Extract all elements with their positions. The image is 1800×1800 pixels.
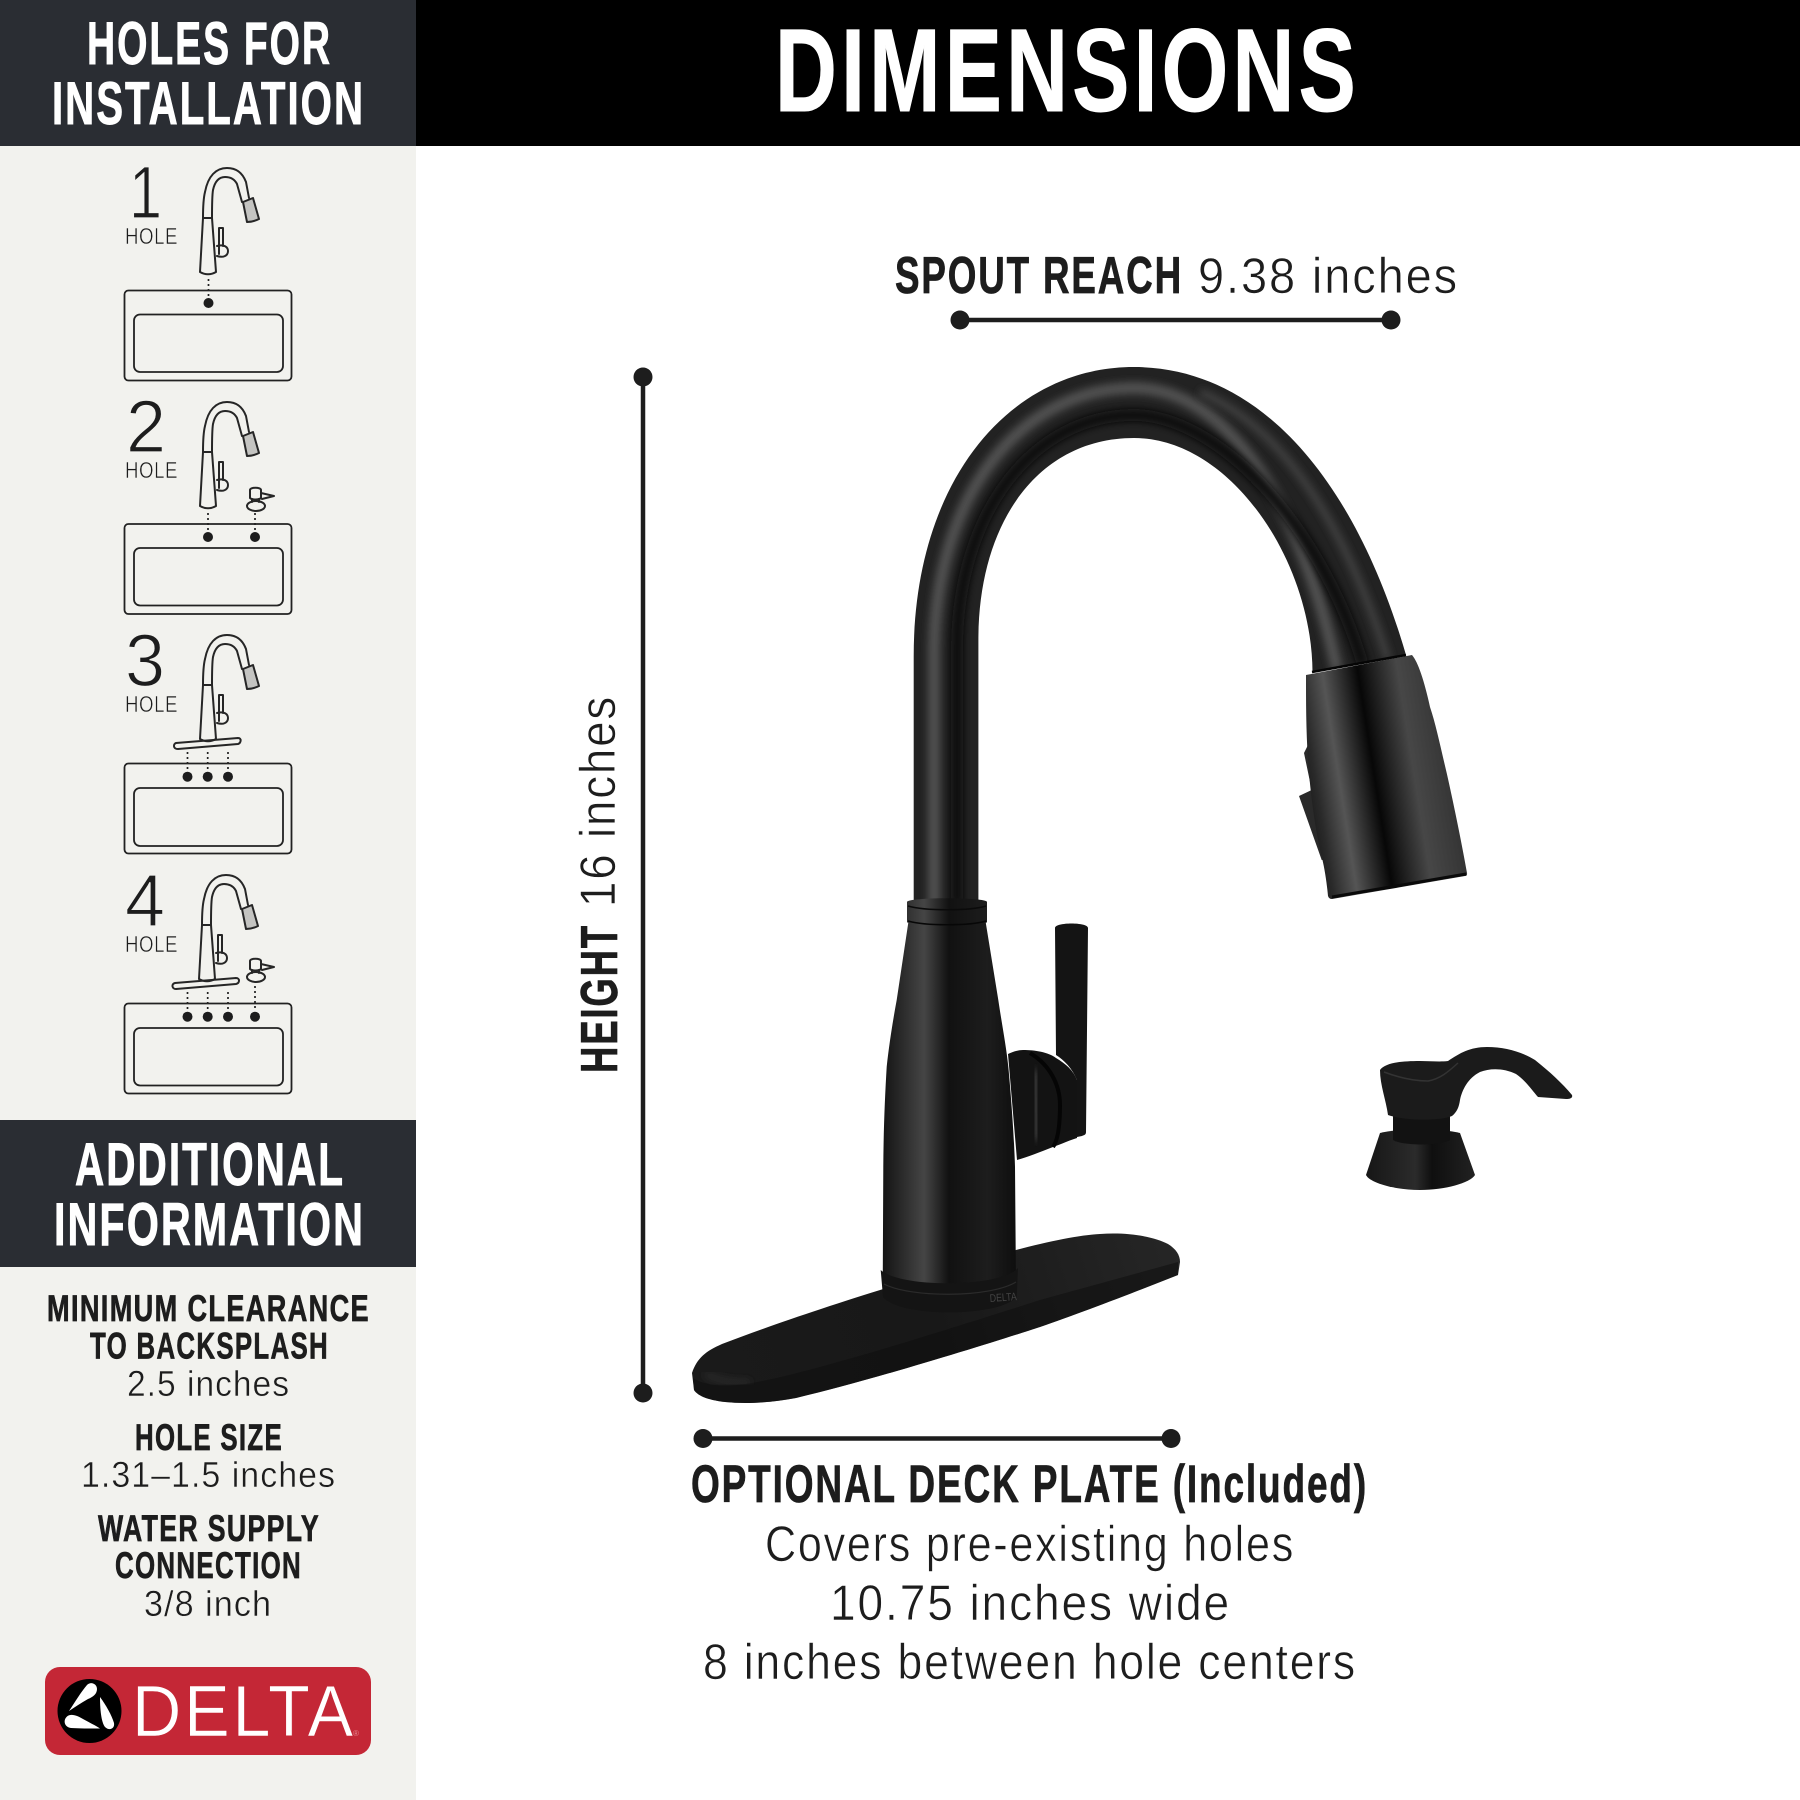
dimension: spout reach: 9.38 inches xyxy=(1198,248,1459,304)
option: 4 hole xyxy=(124,859,292,1094)
text block: minimum clearance xyxy=(47,1288,370,1404)
logo: delta xyxy=(45,1667,371,1755)
dimension: height: HEIGHT xyxy=(571,924,629,1073)
text block: hole size: HOLE SIZE xyxy=(135,1417,283,1458)
dimension: optional deck plate: Covers pre-existing holes xyxy=(765,1516,1295,1572)
faucet handle xyxy=(1008,924,1088,1160)
heading: holes for installation xyxy=(0,0,416,146)
option: 1 hole xyxy=(124,151,292,380)
heading: dimensions: DIMENSIONS xyxy=(775,5,1360,137)
dimension: height xyxy=(570,368,652,1402)
option: 4 hole: 4 xyxy=(125,859,165,942)
text block: hole size xyxy=(81,1417,336,1495)
heading: dimensions xyxy=(416,0,1800,146)
panel: sidebar xyxy=(0,0,416,1800)
illustration: soap dispenser xyxy=(1366,1047,1572,1190)
text block: minimum clearance: MINIMUM CLEARANCE xyxy=(47,1288,370,1329)
dimension: optional deck plate xyxy=(691,1429,1368,1690)
text block: water supply connection: 3/8 inch xyxy=(144,1583,272,1624)
option: 3 hole xyxy=(124,619,292,854)
logo: delta: ® xyxy=(353,1729,359,1738)
text block: water supply connection xyxy=(98,1508,320,1624)
dimension: spout reach xyxy=(895,247,1459,330)
spout tube xyxy=(900,360,1420,920)
text block: minimum clearance: 2.5 inches xyxy=(127,1363,290,1404)
text block: water supply connection: WATER SUPPLY xyxy=(98,1508,320,1549)
dimension: optional deck plate: OPTIONAL DECK PLATE (Included) xyxy=(691,1455,1368,1514)
faucet base ring: DELTA xyxy=(989,1291,1018,1305)
heading: additional information: INFORMATION xyxy=(54,1191,365,1258)
option: 3 hole: HOLE xyxy=(125,691,178,717)
heading: additional information xyxy=(0,1120,416,1267)
dimension: spout reach: SPOUT REACH xyxy=(895,247,1183,305)
spray head xyxy=(1299,655,1467,899)
text block: minimum clearance: TO BACKSPLASH xyxy=(90,1326,329,1366)
dimension: optional deck plate: 8 inches between hole centers xyxy=(703,1634,1357,1690)
heading: additional information: ADDITIONAL xyxy=(75,1131,345,1198)
deck plate xyxy=(692,1234,1180,1403)
option: 2 hole: 2 xyxy=(126,385,166,468)
option: 1 hole: HOLE xyxy=(125,223,178,249)
faucet body xyxy=(883,918,1016,1290)
faucet collar xyxy=(907,898,987,925)
option: 4 hole: HOLE xyxy=(125,931,178,957)
option: 2 hole xyxy=(124,385,292,614)
option: 3 hole: 3 xyxy=(125,619,165,702)
faucet base ring xyxy=(881,1268,1018,1312)
logo: delta: DELTA xyxy=(132,1672,356,1752)
option: 2 hole: HOLE xyxy=(125,457,178,483)
illustration: faucet xyxy=(692,360,1467,1403)
dimension: height: 16 inches xyxy=(570,695,626,907)
heading: holes for installation: INSTALLATION xyxy=(52,70,365,137)
dimension: optional deck plate: 10.75 inches wide xyxy=(830,1575,1231,1631)
text block: hole size: 1.31–1.5 inches xyxy=(81,1454,336,1495)
heading: holes for installation: HOLES FOR xyxy=(87,10,332,77)
option: 1 hole: 1 xyxy=(129,151,162,234)
text block: water supply connection: CONNECTION xyxy=(115,1545,302,1586)
